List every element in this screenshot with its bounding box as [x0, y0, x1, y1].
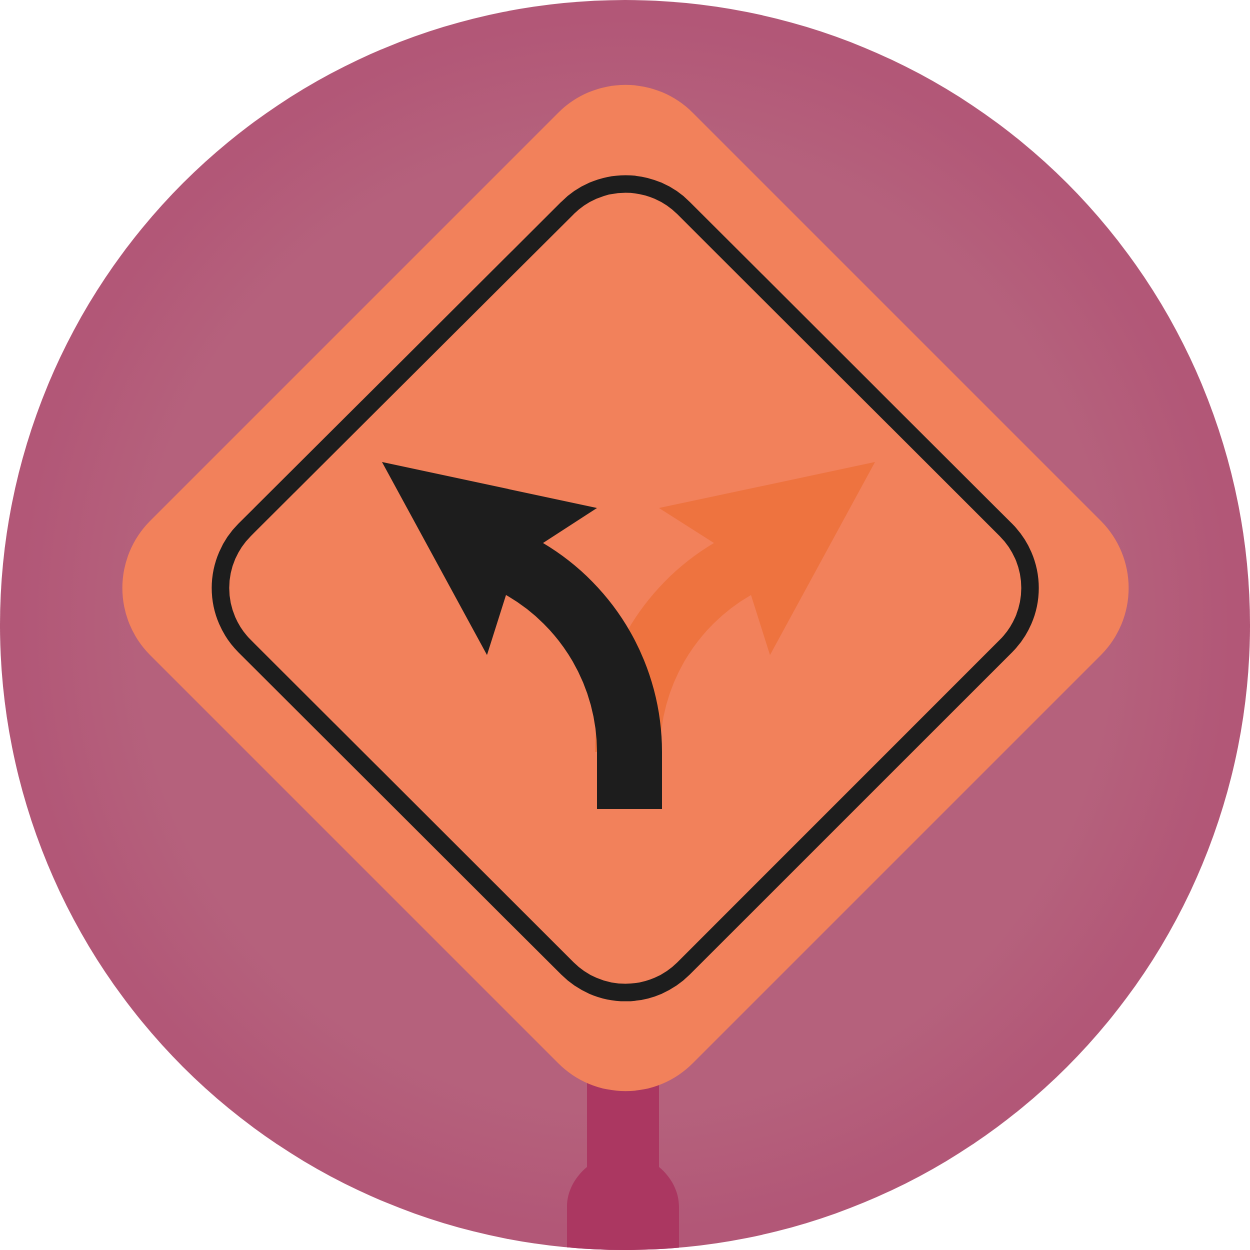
diamond sign board	[122, 85, 1129, 1091]
sign post	[567, 1083, 679, 1250]
sign inner border	[220, 184, 1030, 993]
arrow: faded right branch	[595, 462, 875, 752]
arrow: black left turn	[382, 462, 662, 809]
